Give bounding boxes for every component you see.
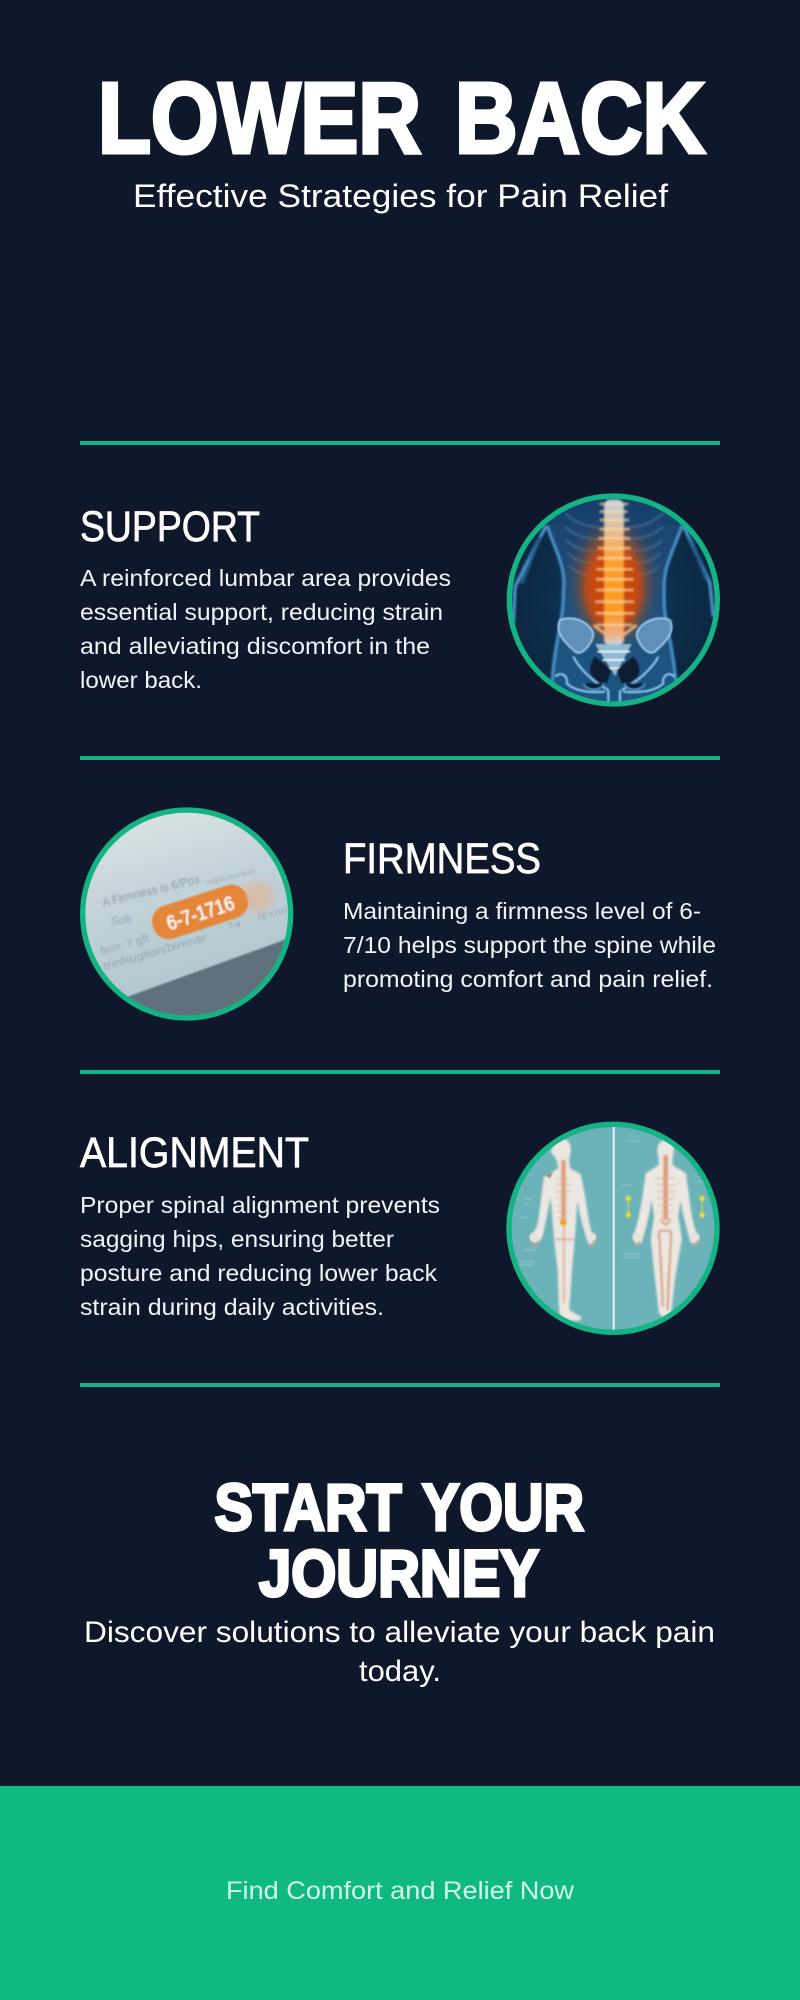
- icon: spinal alignment body diagram: [503, 1120, 730, 1340]
- panel: firmness: [77, 803, 716, 1030]
- text block: support: essential support, reducing strain: [80, 599, 443, 625]
- text block: firmness: promoting comfort and pain relief.: [343, 966, 713, 992]
- panel: alignment: [80, 1120, 730, 1340]
- panel: support: [80, 487, 727, 713]
- heading: support: SUPPORT: [80, 503, 260, 551]
- icon: firmness scale close-up: :7-4: [225, 919, 242, 932]
- icon: glowing lumbar spine x-ray: [506, 493, 720, 707]
- text block: support: and alleviating discomfort in the: [80, 633, 430, 659]
- text block: alignment: sagging hips, ensuring better: [80, 1226, 394, 1252]
- call to action heading: YOUR: [422, 1470, 584, 1544]
- text block: firmness: Maintaining a firmness level of 6-: [343, 898, 701, 924]
- title: [98, 62, 705, 174]
- icon: firmness scale close-up: 6-7-1716: [164, 893, 237, 935]
- call to action heading: [214, 1470, 584, 1610]
- call to action text: today.: [359, 1655, 441, 1688]
- subtitle: Effective Strategies for Pain Relief: [133, 178, 668, 214]
- call to action text: Discover solutions to alleviate your back pain: [84, 1616, 715, 1649]
- icon: firmness scale close-up: trinhuglion/binmar: [103, 932, 209, 973]
- heading: firmness: FIRMNESS: [343, 835, 541, 883]
- text block: alignment: posture and reducing lower back: [80, 1260, 438, 1286]
- footer text: Find Comfort and Relief Now: [226, 1877, 575, 1905]
- icon: firmness scale close-up: Soft: [111, 914, 133, 928]
- icon: firmness scale close-up: A Firmness is 6/Pox: [101, 872, 201, 910]
- call to action heading: JOURNEY: [259, 1536, 539, 1610]
- text block: alignment: Proper spinal alignment prevents: [80, 1192, 440, 1218]
- text block: firmness: [343, 898, 716, 992]
- text block: alignment: strain during daily activities.: [80, 1294, 384, 1320]
- title: LOWER: [98, 62, 421, 174]
- icon: firmness scale close-up: [80, 807, 294, 1021]
- text block: alignment: [80, 1192, 440, 1320]
- text block: support: [80, 565, 451, 693]
- heading: alignment: ALIGNMENT: [80, 1129, 309, 1177]
- icon: firmness scale close-up: firm. 7 gft: [99, 932, 151, 958]
- footer band: [0, 1786, 800, 2000]
- text block: firmness: 7/10 helps support the spine while: [343, 932, 716, 958]
- title: BACK: [455, 62, 705, 174]
- call to action text: [84, 1616, 715, 1688]
- text block: support: A reinforced lumbar area provides: [80, 565, 451, 591]
- icon: firmness scale close-up: (sd) b) firmness: [205, 868, 256, 887]
- call to action heading: START: [214, 1470, 402, 1544]
- text block: support: lower back.: [80, 667, 202, 693]
- icon: firmness scale close-up: 5€ s hm: [256, 905, 288, 922]
